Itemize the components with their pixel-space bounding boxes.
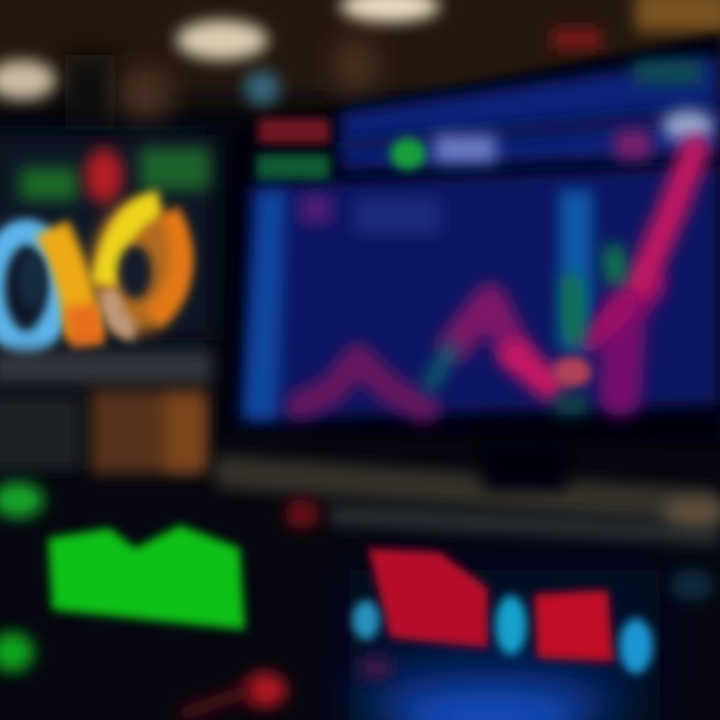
green bottom-left block xyxy=(0,632,34,672)
purple label xyxy=(300,195,332,223)
cyan marker left xyxy=(352,600,380,640)
panel: lower screen with red bars xyxy=(350,548,714,720)
red spot xyxy=(285,499,319,529)
grey strip xyxy=(0,350,212,385)
purple label xyxy=(360,657,392,679)
left blue axis bar xyxy=(242,190,286,420)
chart screen xyxy=(245,165,720,420)
red streak xyxy=(180,690,250,715)
panel: green bars xyxy=(0,482,319,715)
magenta tag xyxy=(615,130,651,160)
red block left xyxy=(368,548,488,648)
top right pale spot xyxy=(662,110,714,142)
red block right xyxy=(534,590,614,662)
panel: colourful logo display xyxy=(0,135,215,348)
ring: blue xyxy=(0,232,60,344)
ring: yellow orange swoosh xyxy=(52,228,84,340)
monitor: trading chart xyxy=(225,35,720,445)
header red tag xyxy=(258,118,330,144)
green block xyxy=(48,525,245,630)
shelf warm right xyxy=(663,498,720,526)
logo top red xyxy=(85,148,123,204)
ring: orange right xyxy=(152,212,181,318)
shelf lower xyxy=(330,505,720,545)
brown block xyxy=(90,390,206,474)
monitor frame xyxy=(225,35,720,445)
ring: pale lower xyxy=(110,290,135,330)
ring centre dark xyxy=(118,245,152,299)
header green tag xyxy=(256,154,330,180)
header pale label xyxy=(434,135,496,163)
blue screen tint xyxy=(350,570,660,720)
header green button xyxy=(390,138,426,170)
cyan marker right xyxy=(619,618,653,674)
chart stem xyxy=(555,395,587,415)
header band xyxy=(340,55,720,170)
ceiling with lights xyxy=(0,0,720,130)
green top-left block xyxy=(0,482,44,518)
ring: right filled body xyxy=(92,202,184,334)
cyan marker middle xyxy=(495,595,527,655)
header dark strip xyxy=(340,105,720,152)
brown block highlight xyxy=(165,395,205,470)
chart line: magenta xyxy=(300,150,695,408)
ring: yellow right xyxy=(105,204,160,285)
red lower spot xyxy=(243,672,287,708)
shelf upper xyxy=(215,455,720,525)
teal spot right xyxy=(670,569,714,601)
desk items under logo xyxy=(0,350,720,545)
top right teal tag xyxy=(634,60,702,84)
dark grey base xyxy=(0,395,80,470)
ring: orange swoosh foot xyxy=(82,305,88,348)
blue glow xyxy=(360,670,620,720)
chart marker xyxy=(552,356,592,388)
monitor stand xyxy=(482,440,568,490)
blue glow core xyxy=(405,700,575,720)
middle blue bar xyxy=(560,190,592,350)
logo top stripe green xyxy=(20,168,78,200)
faint chart text block xyxy=(355,198,440,234)
logo background xyxy=(0,135,215,340)
logo top stripe green right xyxy=(140,148,210,190)
left ring centre dark xyxy=(18,252,46,308)
